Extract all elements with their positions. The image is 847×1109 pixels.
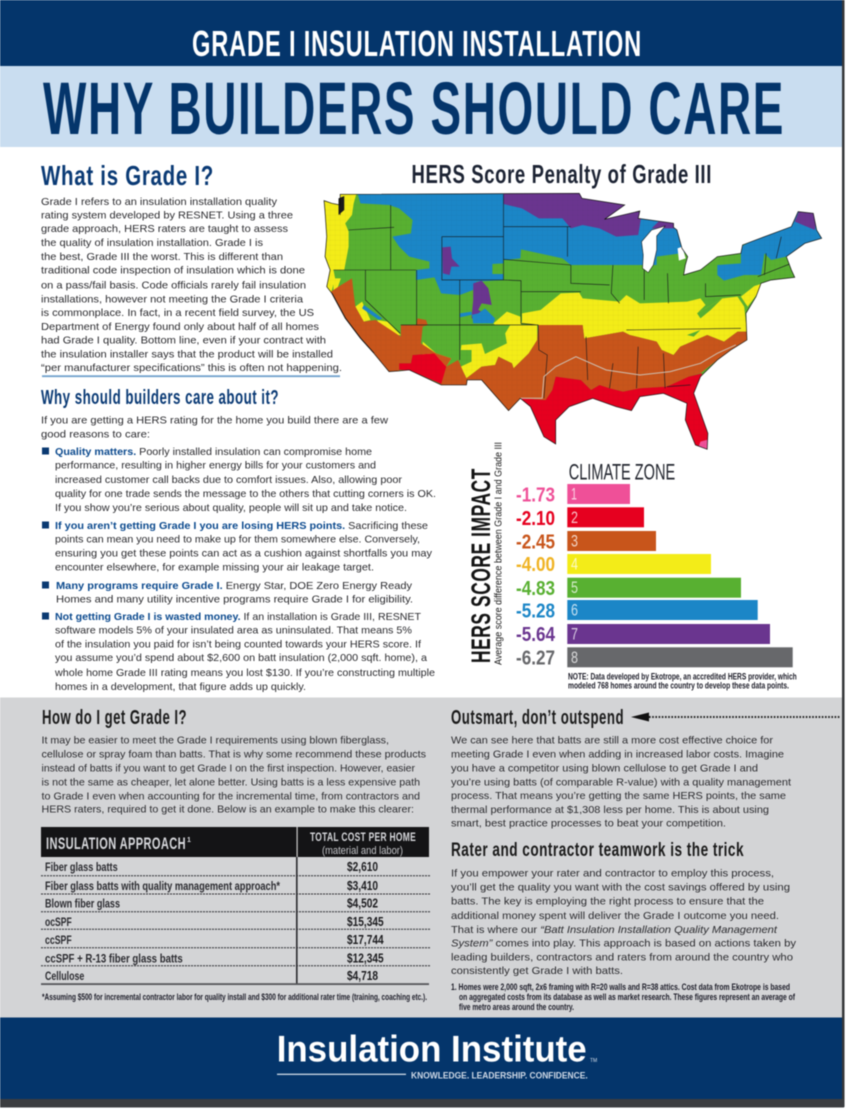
bullet: wasted money: software models 5% of your insulated area as uninsulated. That means 5%: [55, 626, 412, 637]
zone 6: 6: [571, 600, 578, 620]
heading: What is Grade I?: [41, 160, 214, 191]
paragraph: is commonplace. In fact, in a recent field survey, the US: [41, 308, 314, 319]
bullet: losing HERS points: encounter elsewhere, for example missing your air leakage target.: [55, 562, 374, 573]
section: rater and contractor teamwork: [451, 840, 797, 1013]
paragraph: System” comes into play. This approach is based on actions taken by: [451, 938, 797, 949]
bullet: quality matters: If you show you’re serious about quality, people will sit up and take notice.: [55, 503, 407, 514]
intro: good reasons to care:: [41, 429, 150, 440]
bullet: wasted money: whole home Grade III rating means you lost $130. If you’re constructing multiple: [54, 668, 435, 679]
paragraph: [42, 736, 426, 816]
section: outsmart, don't outspend: [451, 707, 841, 830]
row: blown fiber glass: $4,502: [347, 896, 378, 910]
section: how do I get Grade I: [42, 707, 426, 816]
zone 5: [516, 578, 741, 600]
paragraph: batts. The key is employing the right process to ensure that the: [451, 896, 764, 907]
heading: Outsmart, don’t outspend: [451, 707, 624, 729]
row: ccSPF plus batts: [45, 951, 384, 965]
intro: [41, 415, 389, 440]
zone 2: -2.10: [516, 508, 555, 530]
zone 8: [516, 647, 793, 669]
paragraph: is not the same as cheaper, let alone better. Using batts is a less expensive path: [42, 777, 420, 788]
paragraph: thermal performance at $1,308 less per home. This is about using: [451, 805, 769, 816]
row: ccSPF plus batts: ccSPF + R-13 fiber glass batts: [45, 951, 183, 965]
bullet: quality matters: [42, 447, 436, 514]
paragraph: process. That means you’re getting the same HERS points, the same: [451, 791, 786, 802]
paragraph: It may be easier to meet the Grade I requirements using blown fiberglass,: [42, 736, 389, 747]
bullet: wasted money: homes in a development, that figure adds up quickly.: [55, 682, 306, 693]
row: ccSPF plus batts: $12,345: [347, 951, 384, 965]
bullet: losing HERS points: points can mean you need to make up for them somewhere else. Conversely,: [55, 535, 420, 546]
paragraph: the quality of insulation installation. Grade I is: [41, 238, 263, 249]
intro: If you are getting a HERS rating for the home you build there are a few: [41, 415, 389, 426]
bullet: quality matters: quality for one trade sends the message to the others that cutting corners is OK.: [55, 489, 436, 500]
tagline: KNOWLEDGE. LEADERSHIP. CONFIDENCE.: [411, 1070, 588, 1080]
bullet: programs require Grade I: Many programs require Grade I. Energy Star, DOE Zero Energy Ready: [56, 581, 413, 592]
paragraph: on a pass/fail basis. Code officials rarely fail insulation: [41, 280, 306, 291]
zone 8: 8: [571, 648, 578, 667]
chart: HERS score impact by climate zone: [466, 442, 797, 691]
footnote: [451, 982, 796, 1013]
paragraph: you’ll get the quality you want with the cost savings offered by using: [451, 883, 790, 894]
paragraph: If you empower your rater and contractor to employ this process,: [451, 869, 774, 880]
zone 4: [516, 554, 711, 576]
table row lines: [41, 876, 431, 966]
paragraph: you’re using batts (of comparable R-value) with a quality management: [451, 777, 791, 788]
zone 7: [516, 624, 770, 646]
paragraph: to Grade I even when accounting for the incremental time, from contractors and: [42, 791, 420, 802]
rotated chart subtitle: Average score difference between Grade I and Grade III: [492, 442, 504, 665]
bullet: wasted money: of the insulation you paid for isn’t being counted towards your HERS score. If: [55, 639, 421, 650]
heading: Why should builders care about it?: [41, 387, 279, 409]
paragraph: installations, however not meeting the Grade I criteria: [41, 294, 303, 305]
zone 6: [516, 600, 758, 623]
paragraph: you have a competitor using blown cellulose to get Grade I and: [451, 764, 758, 775]
paragraph: Department of Energy found only about half of all homes: [41, 322, 319, 333]
row: ocSPF: ocSPF: [45, 915, 72, 929]
table header: [41, 827, 429, 857]
row: fiber glass batts: $2,610: [347, 860, 378, 874]
paragraph: consistently get Grade I with batts.: [451, 966, 623, 977]
bullet: losing HERS points: ensuring you get these points can act as a cushion against shortfalls you may: [55, 548, 433, 559]
row: batts with quality management: $3,410: [347, 879, 378, 893]
row: blown fiber glass: [45, 896, 378, 910]
table bottom rule: [41, 983, 429, 985]
row: fiber glass batts: [45, 860, 378, 874]
bullet: programs require Grade I: [42, 581, 413, 606]
paragraph: the insulation installer says that the product will be installed: [41, 349, 333, 360]
zone 1: [516, 484, 630, 507]
paragraph: cellulose or spray foam than batts. That is why some recommend these products: [42, 750, 426, 761]
table header: INSULATION APPROACH: [46, 834, 186, 853]
logo wordmark: Insulation Institute: [277, 1029, 587, 1070]
paragraph: We can see here that batts are still a more cost effective choice for: [451, 736, 774, 747]
row: ccSPF: [45, 933, 384, 947]
paragraph: additional money spent will deliver the Grade I outcome you need.: [451, 911, 779, 922]
paragraph: had Grade I quality. Bottom line, even if your contract with: [41, 336, 326, 347]
row: ocSPF: [45, 915, 384, 929]
table header: TOTAL COST PER HOME: [310, 830, 416, 844]
zone 3: 3: [571, 532, 578, 550]
bullet: quality matters: increased customer call backs due to comfort issues. Also, allowing poor: [55, 475, 403, 486]
bullet: programs require Grade I: Homes and many utility incentive programs require Grade I for eligibility.: [56, 595, 413, 606]
zone 1: 1: [571, 484, 577, 504]
row: ccSPF: ccSPF: [45, 933, 72, 947]
section: what is Grade I: [41, 160, 342, 377]
bullet: losing HERS points: If you aren’t getting Grade I you are losing HERS points. Sacrificing these: [55, 521, 428, 532]
row: batts with quality management: Fiber glass batts with quality management approach*: [45, 879, 280, 893]
bullet: wasted money: you assume you’d spend about $2,600 on batt insulation (2,000 sqft. home), a: [55, 653, 427, 664]
table divider: [296, 857, 298, 984]
legend heading: CLIMATE ZONE: [569, 459, 675, 484]
rotated chart title: HERS SCORE IMPACT: [466, 468, 496, 663]
zone 5: 5: [571, 578, 578, 597]
row: ccSPF: $17,744: [347, 933, 384, 947]
bullet: quality matters: Quality matters. Poorly installed insulation can compromise home: [55, 447, 372, 458]
paragraph: traditional code inspection of insulation which is done: [41, 266, 305, 277]
row: cellulose: Cellulose: [45, 969, 85, 983]
zone 1: -1.73: [516, 485, 555, 507]
zone 2: 2: [571, 508, 578, 527]
bullet: losing HERS points: [42, 521, 433, 573]
chart note: [568, 671, 797, 691]
row: blown fiber glass: Blown fiber glass: [45, 896, 120, 910]
map: US climate zones: [320, 190, 825, 453]
trademark: TM: [590, 1058, 597, 1064]
map title: HERS Score Penalty of Grade III: [412, 159, 712, 189]
row: fiber glass batts: Fiber glass batts: [45, 860, 118, 874]
table header: (material and labor): [322, 845, 403, 857]
table footnote: *Assuming $500 for incremental contractor labor for quality install and $300 for additional rater time (training, coaching etc.).: [42, 992, 427, 1003]
zone 5: -4.83: [516, 578, 555, 600]
zone 3: [516, 531, 656, 553]
paragraph: the best, Grade III the worst. This is different than: [41, 252, 283, 263]
paragraph: [451, 869, 797, 977]
paragraph: smart, best practice processes to beat your competition.: [451, 819, 726, 830]
bullet: quality matters: performance, resulting in higher energy bills for your customers and: [55, 461, 376, 472]
paragraph: Grade I refers to an insulation installation quality: [41, 197, 278, 208]
heading: How do I get Grade I?: [42, 707, 187, 729]
paragraph: That is where our “Batt Insulation Installation Quality Management: [451, 925, 778, 936]
footnote: five metro areas around the country.: [459, 1002, 574, 1013]
paragraph: instead of batts if you want to get Grade I on the first inspection. However, easier: [42, 764, 416, 775]
arrow: [631, 712, 841, 722]
zone 8: -6.27: [516, 647, 555, 669]
row: ocSPF: $15,345: [347, 915, 384, 929]
tagline rule: [277, 1074, 406, 1075]
row: cellulose: $4,718: [347, 969, 378, 983]
zone 6: -5.28: [516, 601, 555, 623]
paragraph: HERS raters, required to get it done. Below is an example to make this clearer:: [42, 805, 414, 816]
footer band: [0, 1018, 842, 1099]
zone 4: -4.00: [516, 554, 555, 576]
table: insulation cost comparison: [41, 827, 431, 1003]
zone 4: 4: [571, 554, 578, 574]
paragraph: [451, 736, 791, 830]
zone 7: -5.64: [516, 624, 556, 646]
paragraph: “per manufacturer specifications” this is often not happening.: [41, 363, 342, 374]
zone 3: -2.45: [516, 531, 555, 553]
bullet: wasted money: [42, 612, 435, 693]
paragraph: rating system developed by RESNET. Using a three: [41, 210, 293, 222]
paragraph: meeting Grade I even when adding in increased labor costs. Imagine: [451, 750, 784, 761]
zone 7: 7: [571, 624, 578, 644]
section: why should builders care: [41, 387, 436, 693]
paragraph: leading builders, contractors and raters from around the country who: [451, 952, 793, 963]
blue rule: [42, 375, 340, 377]
zone 2: [516, 507, 644, 530]
row: cellulose: [45, 969, 378, 983]
paragraph: [41, 197, 342, 374]
header band: [0, 0, 842, 150]
panel: gray lower section: [0, 698, 842, 1018]
paragraph: grade approach, HERS raters are taught to assess: [41, 224, 288, 235]
bullet: wasted money: Not getting Grade I is wasted money. If an installation is Grade III, RESNET: [55, 612, 422, 623]
table header: 1: [187, 837, 191, 844]
